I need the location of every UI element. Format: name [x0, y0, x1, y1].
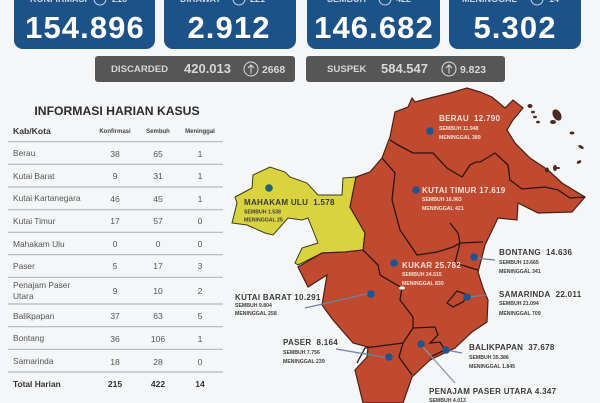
table: daily cases: 9: [113, 286, 118, 296]
table: daily cases: Konfirmasi: [99, 129, 131, 135]
table: daily cases: 36: [110, 334, 120, 344]
label: Mahakam Ulu: MAHAKAM ULU 1.578: [244, 198, 335, 207]
label: Kutai Barat: MENINGGAL 258: [235, 311, 277, 317]
table: daily cases: 1: [198, 171, 203, 181]
table: daily cases: Kab/Kota: [13, 126, 51, 136]
table: daily cases: Total Harian: [13, 379, 61, 389]
panel: deaths card: [449, 0, 581, 49]
label: Penajam Paser Utara: [429, 387, 557, 403]
panel: deaths card: 5.302: [473, 10, 557, 45]
panel: discarded: DISCARDED: [111, 64, 168, 75]
table: daily cases: Utara: [13, 291, 34, 301]
table: daily cases: 17: [110, 216, 120, 226]
panel: confirmed card: 154.896: [25, 10, 145, 45]
small islands: [528, 104, 584, 172]
table: daily cases: 37: [110, 311, 120, 321]
table: daily cases: 38: [110, 149, 120, 159]
table: daily cases: 0: [156, 239, 161, 249]
panel: discarded: 420.013: [184, 61, 231, 76]
table: daily cases: 57: [153, 216, 163, 226]
table: daily cases: 215: [108, 379, 122, 389]
label: Mahakam Ulu: [244, 198, 335, 224]
table: daily cases: 10: [153, 286, 163, 296]
label: Berau: [439, 114, 501, 141]
region: Mahakam Ulu: [232, 167, 365, 265]
table: daily cases: Mahakam Ulu: [13, 239, 65, 249]
leader lines: [305, 258, 495, 383]
region: red provinces: [298, 88, 585, 403]
table: daily cases: 46: [110, 194, 120, 204]
label: Kukar: SEMBUH 24.515: [402, 272, 442, 278]
table: daily cases: 31: [153, 171, 163, 181]
lake notch: [399, 286, 405, 290]
panel: recovered card: [307, 0, 440, 49]
label: Bontang: [499, 248, 573, 275]
label: Bontang: SEMBUH 13.665: [499, 260, 539, 266]
label: Berau: BERAU 12.790: [439, 114, 501, 123]
label: Samarinda: MENINGGAL 709: [499, 311, 541, 317]
label: Kukar: MENINGGAL 830: [402, 281, 444, 287]
panel: confirmed card: [14, 0, 155, 49]
panel: suspect: SUSPEK: [327, 64, 367, 75]
panel: discarded: [95, 56, 295, 82]
label: Paser: PASER 8.164: [283, 338, 338, 347]
label: Mahakam Ulu: MENINGGAL 25: [244, 218, 283, 224]
table: daily cases: 1: [198, 194, 203, 204]
panel: treated card: 2.912: [187, 10, 271, 45]
location dots: [265, 127, 478, 361]
label: Berau: SEMBUH 11.948: [439, 126, 479, 132]
label: Kutai Barat: KUTAI BARAT 10.291: [235, 293, 321, 302]
label: Samarinda: SAMARINDA 22.011: [499, 290, 582, 299]
table: daily cases: Samarinda: [13, 356, 54, 366]
panel: suspect: 9.823: [460, 65, 486, 76]
table: daily cases: 3: [198, 261, 203, 271]
table: daily cases: Meninggal: [185, 129, 215, 135]
label: Kutai Timur: KUTAI TIMUR 17.619: [422, 186, 506, 195]
label: Kukar: [402, 261, 461, 287]
label: Berau: MENINGGAL 389: [439, 135, 481, 141]
label: Paser: SEMBUH 7.756: [283, 350, 320, 356]
table: daily cases: Kutai Barat: [13, 171, 55, 181]
panel: suspect: 584.547: [381, 61, 428, 76]
label: Kutai Timur: MENINGGAL 421: [422, 206, 464, 212]
table: daily cases: 5: [113, 261, 118, 271]
label: Paser: [283, 338, 338, 365]
table: daily cases: 0: [113, 239, 118, 249]
label: Bontang: BONTANG 14.636: [499, 248, 573, 257]
table: daily cases: 422: [151, 379, 165, 389]
table: daily cases: 5: [198, 311, 203, 321]
table: daily cases: Balikpapan: [13, 311, 55, 321]
table: daily cases: 65: [153, 149, 163, 159]
table: daily cases: 0: [198, 357, 203, 367]
table: daily cases: 0: [198, 239, 203, 249]
label: Kutai Timur: [422, 186, 506, 212]
label: Kutai Barat: SEMBUH 9.804: [235, 303, 272, 309]
table: daily cases: Penajam Paser: [13, 280, 70, 290]
table: daily cases: 106: [151, 334, 165, 344]
table: daily cases: [8, 126, 223, 389]
table: daily cases: 9: [113, 171, 118, 181]
table: daily cases: Berau: [13, 148, 36, 158]
label: Samarinda: SEMBUH 21.094: [499, 301, 539, 307]
label: Balikpapan: BALIKPAPAN 37.678: [469, 343, 555, 352]
table: daily cases: Bontang: [13, 333, 45, 343]
label: Bontang: MENINGGAL 341: [499, 269, 541, 275]
region borders: [357, 140, 585, 375]
table: daily cases: 14: [195, 379, 205, 389]
map: East Kalimantan regions: [232, 88, 585, 403]
table: daily cases: Kutai Timur: [13, 216, 56, 226]
label: Balikpapan: MENINGGAL 1.845: [469, 364, 515, 370]
panel: suspect: [306, 56, 505, 82]
label: Penajam Paser Utara: PENAJAM PASER UTARA 4.347: [429, 387, 557, 396]
panel: discarded: 2668: [262, 65, 285, 76]
panel: treated card: [164, 0, 296, 49]
label: Kutai Barat: [235, 293, 321, 317]
label: Kukar: KUKAR 25.782: [402, 261, 461, 270]
table: daily cases: 2: [198, 286, 203, 296]
label: Mahakam Ulu: SEMBUH 1.538: [244, 210, 281, 216]
table: daily cases: 0: [198, 216, 203, 226]
table: daily cases: 18: [110, 357, 120, 367]
label: Samarinda: [499, 290, 582, 317]
table: daily cases: Paser: [13, 261, 35, 271]
table: daily cases: 17: [153, 261, 163, 271]
table: daily cases: Sembuh: [146, 129, 170, 135]
heading: daily case information: INFORMASI HARIAN KASUS: [34, 104, 200, 118]
table: daily cases: 1: [198, 334, 203, 344]
table: daily cases: 45: [153, 194, 163, 204]
table: daily cases: Kutai Kartanegara: [13, 193, 81, 203]
panel: recovered card: 146.682: [314, 10, 434, 45]
label: Paser: MENINGGAL 239: [283, 359, 325, 365]
table: daily cases: 1: [198, 149, 203, 159]
table: daily cases: 63: [153, 311, 163, 321]
label: Kutai Timur: SEMBUH 16.963: [422, 197, 462, 203]
table: daily cases: 28: [153, 357, 163, 367]
label: Balikpapan: SEMBUH 35.386: [469, 355, 509, 361]
label: Balikpapan: [469, 343, 555, 370]
